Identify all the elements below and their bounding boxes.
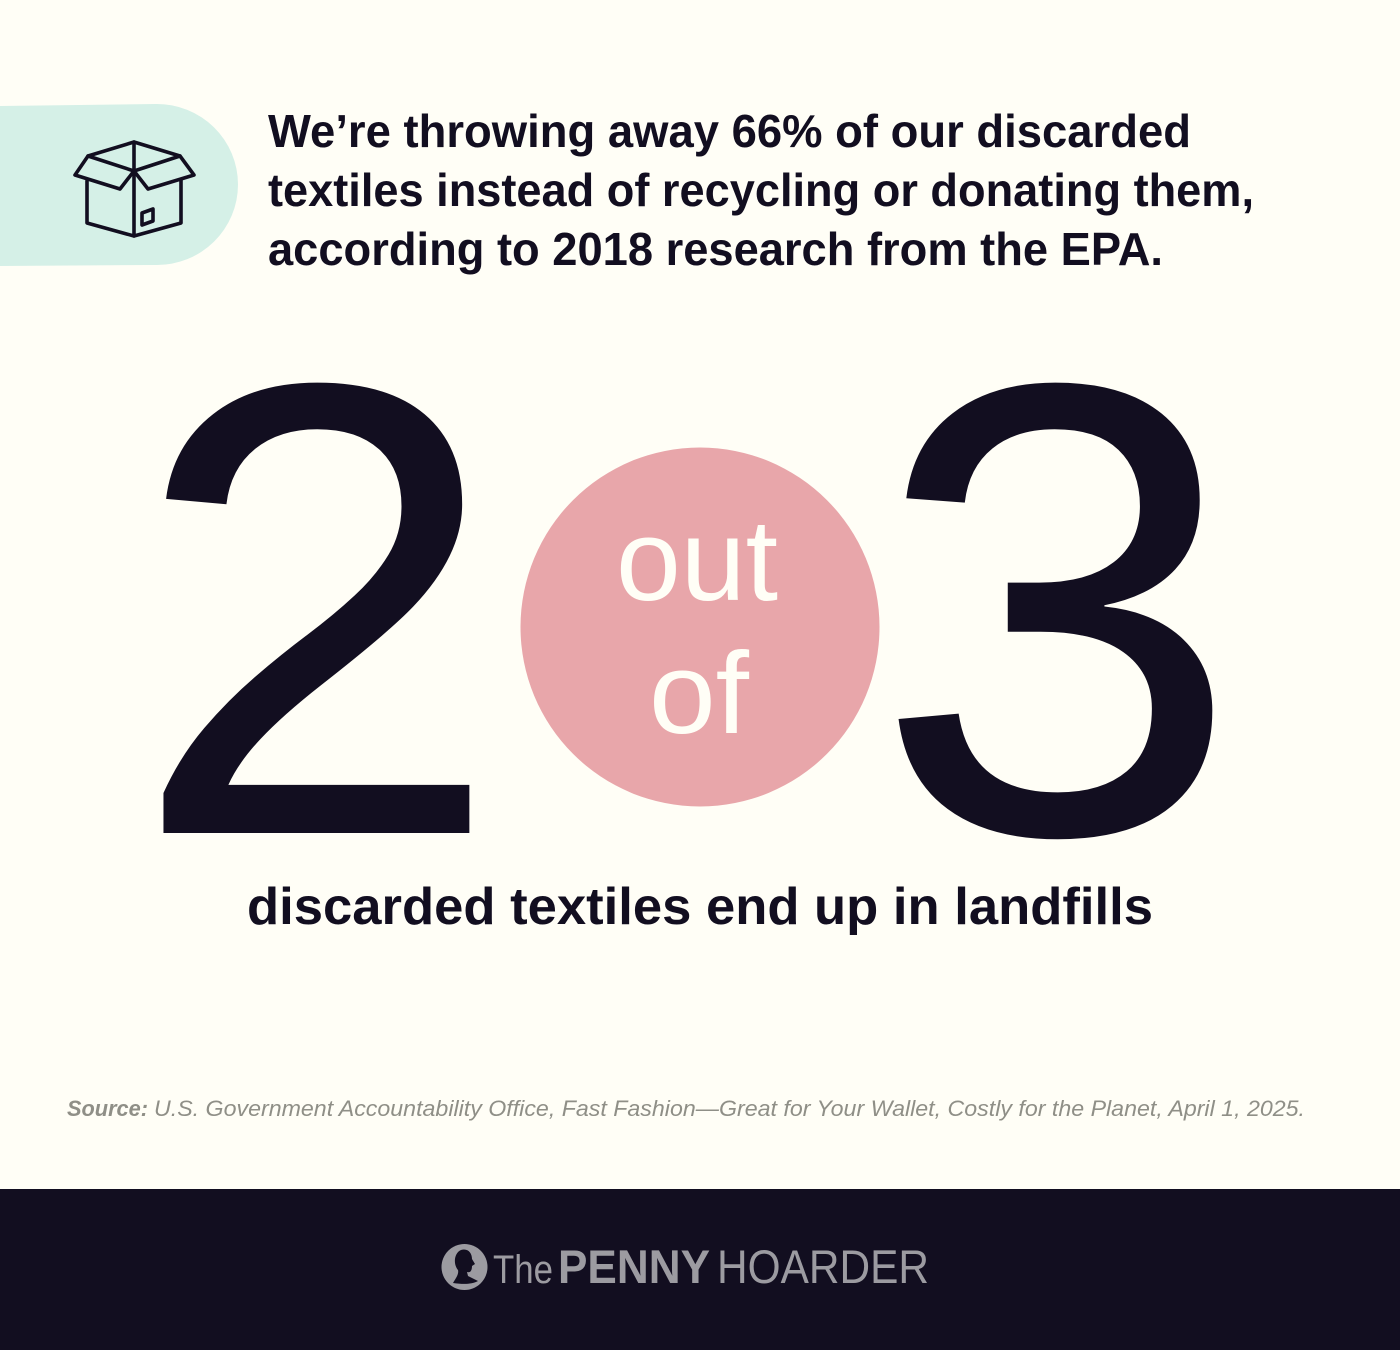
heading text: We’re throwing away 66% of our discarded	[268, 105, 1191, 157]
heading text: textiles instead of recycling or donating them,	[268, 164, 1254, 216]
logo wordmark: The	[493, 1248, 553, 1292]
icon: penny silhouette	[442, 1244, 488, 1290]
icon: open box	[75, 142, 194, 236]
pink circle with out of: of	[649, 628, 750, 758]
big number 3: 3	[873, 250, 1241, 970]
big number 2: 2	[130, 249, 503, 970]
heading text	[268, 105, 1254, 275]
subheading: discarded textiles end up in landfills	[247, 878, 1153, 936]
logo wordmark	[493, 1240, 929, 1293]
logo wordmark: HOARDER	[717, 1240, 929, 1293]
footer logo	[442, 1240, 929, 1293]
footer band	[0, 1189, 1400, 1350]
icon panel: mint pill	[0, 104, 238, 266]
logo wordmark: PENNY	[558, 1240, 710, 1293]
pink circle with out of: out	[616, 495, 778, 625]
source line: U.S. Government Accountability Office, Fast Fashion—Great for Your Wallet, Costly for the Planet, April 1, 2025.	[154, 1096, 1305, 1121]
source line: Source:	[67, 1096, 148, 1121]
heading text: according to 2018 research from the EPA.	[268, 223, 1163, 275]
pink circle with out of	[520, 448, 880, 806]
